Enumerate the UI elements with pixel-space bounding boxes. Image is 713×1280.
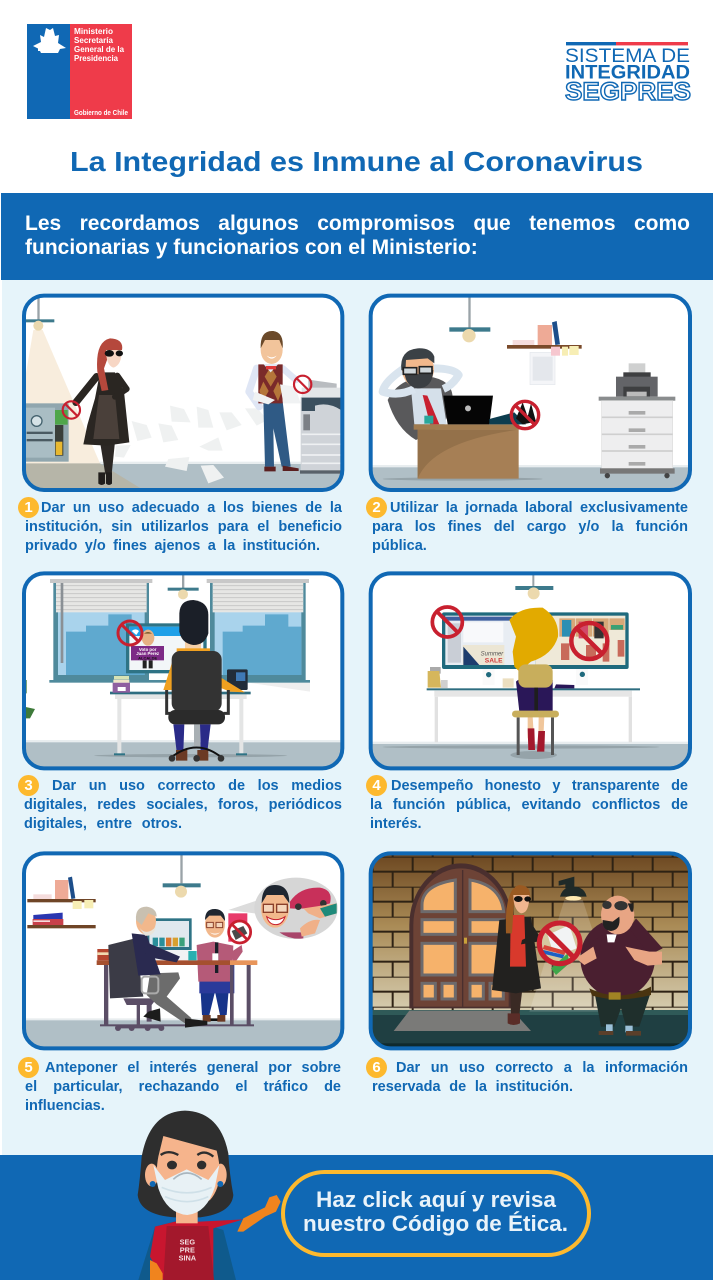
woman in black coat [76,338,129,485]
badge 5 [18,1057,39,1078]
caption 4: interés. [370,816,422,832]
logo text: General de la [74,44,124,54]
thought bubble [228,878,338,939]
panel 4 illustration: woman at shopping and social screens [371,573,690,768]
panel 2 illustration: man relaxing at work [371,296,690,490]
street [371,1010,690,1048]
monitor with campaign post: ALCALDE [138,655,158,660]
mascot: woman with face mask: PRE [180,1246,195,1255]
badge 4: 4 [372,777,381,794]
panel frame [371,296,690,490]
logo text: Gobierno de Chile [74,108,128,117]
desk [97,949,257,1026]
caption 5: influencias. [25,1098,105,1114]
button text: nuestro Código de Ética. [303,1211,568,1236]
caption 4: la función pública, evitando conflictos de [370,797,688,813]
left window [50,579,152,680]
prohibition sign on magazine [228,921,251,943]
man with vest at copier [249,331,301,471]
icon: coat of arms [33,28,66,53]
panel frame [24,296,342,490]
caption 3 [18,775,342,832]
caption 2: pública. [372,538,427,554]
panel frame [24,573,342,768]
caption 6: reservada de la institución. [372,1079,573,1095]
safe [25,403,69,462]
panel frame [371,573,690,768]
shelf with books and notes [507,321,582,385]
wide monitors: Summer [481,652,504,658]
panel 3 illustration: political use of social media [24,573,342,768]
logo text [74,26,128,117]
doormat [394,1011,531,1031]
plant [26,680,35,718]
wooden door [409,863,513,1008]
caption 2 [366,497,688,554]
envelope, money and prohibition sign [539,923,580,975]
monitor [147,918,192,960]
woman with blonde hair from behind [509,608,574,755]
badge 3 [18,775,39,796]
badge 4 [366,775,387,796]
caption 3: digitales, redes sociales, foros, periódicos [24,797,342,813]
young man across desk [197,909,247,1022]
title: La Integridad es Inmune al Coronavirus [70,146,643,177]
intro text: funcionarias y funcionarios con el Ministerio: [25,236,478,259]
caption 2: para los fines del cargo y/o la función [372,519,688,535]
badge 5: 5 [24,1059,33,1076]
panel 1 illustration: misuse of institutional goods [24,296,342,490]
flying papers [115,406,268,483]
logo text: Secretaría [74,35,113,45]
caption 1: Dar un uso adecuado a los bienes de la [41,500,342,516]
button: code of ethics [283,1172,589,1255]
badge 2 [366,497,387,518]
mascot: woman with face mask [138,1111,281,1280]
logo: Sistema de Integridad Segpres [565,42,691,106]
copier [300,380,342,474]
right window [207,579,309,680]
panel frame [24,853,342,1048]
logo: Gobierno de Chile [27,24,132,119]
panel: content background [2,280,713,1155]
desk [110,692,251,755]
desk [414,424,519,479]
logo text: Presidencia [74,53,118,63]
relaxed man at desk [383,348,459,440]
wide monitors [442,612,629,685]
caption 4 [366,775,688,832]
badge 6 [366,1057,387,1078]
monitor with campaign post: Voto por [139,647,157,652]
desk [427,688,640,742]
badge 1 [18,497,39,518]
laptop [443,396,493,424]
woman in long coat [492,885,541,1025]
ceiling lamp [163,853,201,898]
footer band [0,1155,713,1280]
caption 5 [18,1057,341,1114]
prohibition sign [63,401,80,419]
logo text: Ministerio [74,26,113,36]
light cone [24,330,100,463]
ceiling lamp [515,573,553,599]
filing cabinet [599,397,675,478]
prohibition signs [432,607,607,659]
desk phone [227,669,248,690]
caption 4: Desempeño honesto y transparente de [391,778,688,794]
caption 2: Utilizar la jornada laboral exclusivamente [390,500,688,516]
badge 6: 6 [372,1059,381,1076]
caption 6 [366,1057,688,1095]
mascot: woman with face mask: SINA [179,1254,197,1263]
panel frame [371,853,690,1048]
brick wall [371,853,690,1012]
logo: Sistema de Integridad Segpres: INTEGRIDAD [565,62,690,84]
books and box [113,676,130,693]
logo: Sistema de Integridad Segpres: SEGPRES [565,78,691,106]
wall lamp [559,877,587,901]
caption 3: Dar un uso correcto de los medios [52,778,342,794]
printer [616,363,658,397]
person from behind in office chair [163,600,245,762]
caption 5: Anteponer el interés general por sobre [45,1060,341,1076]
shelves with books [27,877,96,928]
monitor with campaign post [126,623,207,673]
monitor with campaign post: Juan Perez [136,651,159,656]
mascot: woman with face mask: SEG [180,1237,195,1246]
badge 3: 3 [24,777,33,794]
badge 2: 2 [372,499,381,516]
caption 5: el particular, rechazando el tráfico de [25,1079,341,1095]
prohibition sign [118,621,142,645]
caption 1: privado y/o fines ajenos a la institución. [25,538,320,554]
panel 5 illustration: influence peddling at desk [24,853,342,1048]
wide monitors: SALE [485,658,503,665]
button text [303,1187,568,1236]
prohibition sign [511,401,539,429]
intro text [25,212,690,259]
ceiling lamp [168,573,199,599]
panel 6 illustration: selling reserved information at night [371,853,690,1048]
badge 1: 1 [24,499,33,516]
ceiling lamp [449,296,490,342]
caption 3: digitales, entre otros. [24,816,182,832]
heavyset man with beard [576,896,663,1036]
caption 1: institución, sin utilizarlos para el beneficio [25,519,342,535]
older man in chair [108,907,207,1031]
button text: Haz click aquí y revisa [316,1187,557,1212]
caption 6: Dar un uso correcto a la información [396,1060,688,1076]
desk organizer and mug [428,667,514,688]
intro text: Les recordamos algunos compromisos que tenemos como [25,212,690,235]
logo: Sistema de Integridad Segpres: SISTEMA DE [565,45,690,67]
legs on desk [489,412,526,424]
caption 1 [18,497,342,554]
intro band [1,193,713,280]
ceiling lamp [26,298,54,331]
